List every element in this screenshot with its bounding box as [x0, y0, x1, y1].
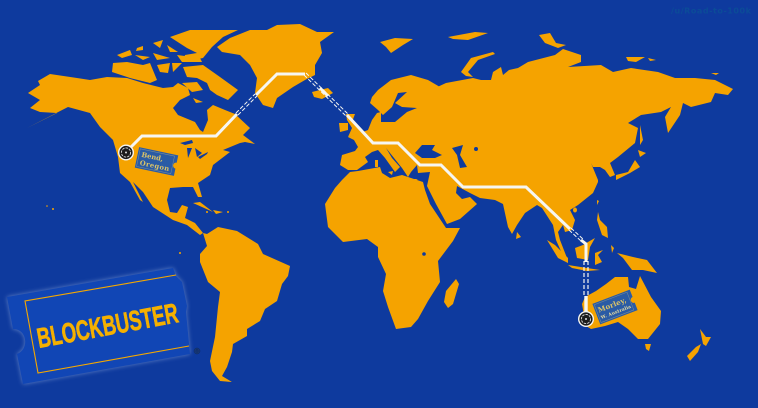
New Zealand	[687, 329, 711, 361]
route: dashed crossing to Borneo	[569, 228, 584, 241]
route: Bend to Greenland	[131, 114, 237, 147]
label ticket: Bend, Oregon	[135, 147, 178, 176]
route: across Iceland	[320, 88, 328, 96]
label ticket: Morley, W. Australia	[592, 290, 638, 324]
ticket body	[7, 268, 190, 384]
Greenland	[217, 24, 334, 108]
Caribbean islands	[46, 202, 229, 254]
BLOCKBUSTER wordmark: BLOCKBUSTER	[34, 297, 181, 354]
registered mark	[194, 348, 200, 355]
label ticket: Bend, Oregon: Oregon	[139, 159, 170, 173]
North America	[27, 74, 255, 235]
label ticket: Bend, Oregon: Bend,	[141, 151, 164, 163]
Southeast Asia islands	[516, 200, 614, 271]
route: dashed crossing to Australia	[584, 261, 588, 296]
route: across Greenland	[256, 74, 305, 95]
label ticket: Morley, W. Australia: W. Australia	[599, 304, 632, 321]
Japan and Sakhalin	[616, 125, 646, 180]
pin: Morley disc	[578, 311, 594, 327]
Blockbuster logo ticket	[7, 268, 200, 384]
route: across Eurasia	[347, 115, 570, 229]
route: dashed crossing to Europe	[304, 73, 348, 116]
Iceland	[312, 88, 333, 99]
Arctic islands	[112, 30, 238, 103]
Arctic Eurasian islands	[380, 32, 719, 77]
New Guinea	[617, 253, 657, 273]
South America	[200, 227, 290, 382]
Great Lakes	[180, 140, 208, 159]
route: dashed crossing to Greenland	[236, 94, 257, 115]
route line	[131, 73, 588, 314]
route: across Borneo	[581, 240, 586, 262]
ticket glow	[7, 268, 190, 384]
registered mark: ®	[195, 348, 199, 355]
label ticket: Morley, W. Australia: Morley,	[596, 295, 628, 314]
credit text: /u/Road-to-100k	[671, 6, 752, 16]
route: into Western Australia	[584, 296, 588, 314]
Africa	[325, 167, 460, 329]
Tasmania	[645, 344, 651, 351]
Eurasia	[340, 49, 733, 258]
ticket yellow border	[25, 275, 189, 373]
Britain and Ireland	[339, 114, 362, 137]
Australia	[582, 276, 661, 339]
Madagascar	[444, 279, 459, 308]
pin: Bend disc	[118, 144, 134, 160]
Mediterranean islands	[375, 160, 418, 181]
Black Sea, Caspian Sea and Aral Sea	[415, 145, 478, 168]
